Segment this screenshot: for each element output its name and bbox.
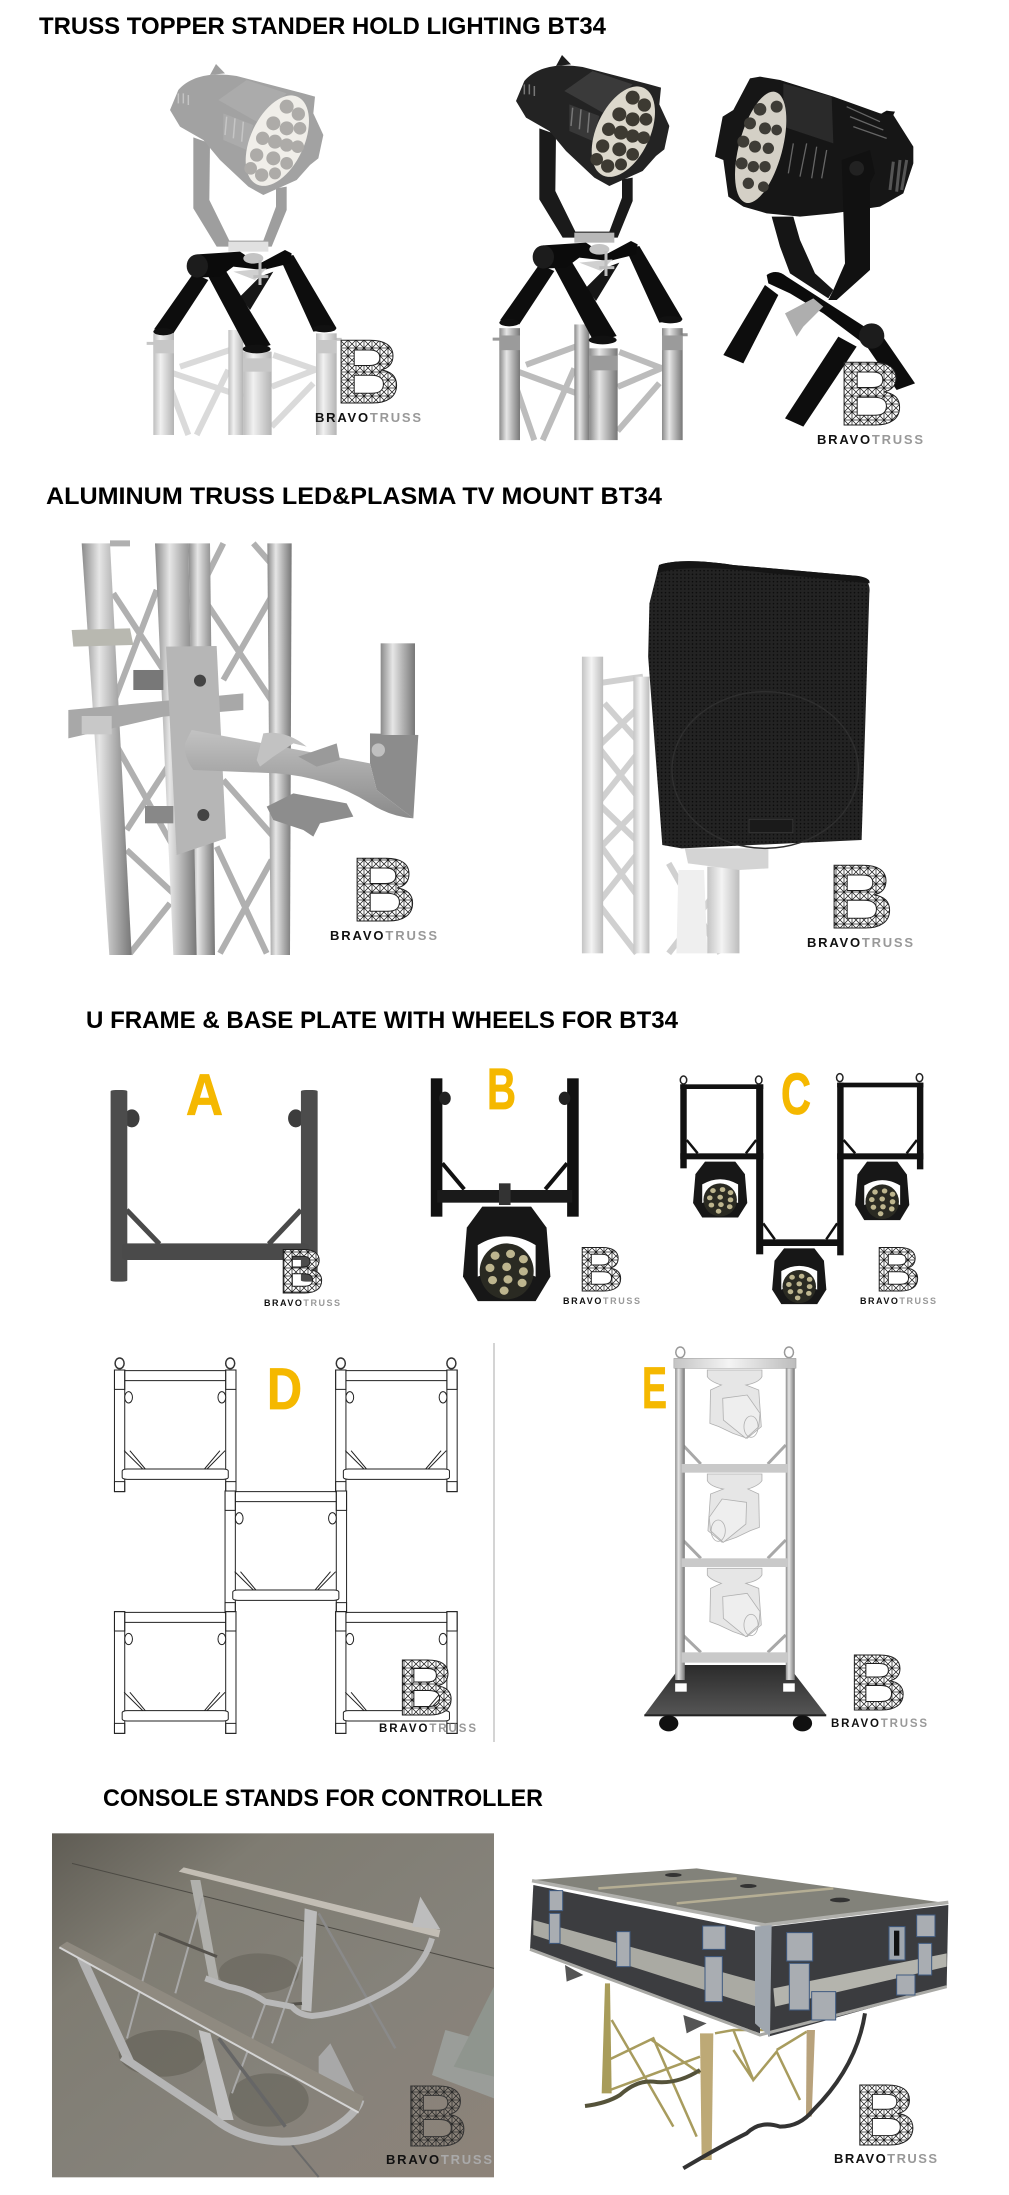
product: U frame A bbox=[111, 1090, 318, 1282]
logo: Bravo Truss 4: BRAVOTRUSS bbox=[807, 935, 913, 950]
logo: Bravo Truss 1: BRAVOTRUSS bbox=[315, 410, 421, 425]
photo: lamp with folded stand bbox=[715, 77, 915, 427]
logo: Bravo Truss 9: BRAVOTRUSS bbox=[831, 1718, 927, 1730]
logo: Bravo Truss 10: BRAVOTRUSS bbox=[386, 2152, 492, 2167]
photo: lamp on truss topper bbox=[493, 55, 688, 440]
photo: truss mount bracket bbox=[68, 543, 418, 955]
logo: Bravo Truss 4: B bbox=[828, 847, 894, 948]
logo: Bravo Truss 6 bbox=[563, 1235, 640, 1306]
logo: Bravo Truss 10: B bbox=[405, 2068, 468, 2165]
logo: Bravo Truss 1 bbox=[315, 322, 421, 425]
logo: Bravo Truss 8 bbox=[379, 1643, 476, 1735]
label: B: B bbox=[487, 1057, 516, 1122]
logo: Bravo Truss 11: B bbox=[854, 2067, 917, 2164]
logo: Bravo Truss 5: BRAVOTRUSS bbox=[264, 1298, 340, 1308]
logo: Bravo Truss 7: BRAVOTRUSS bbox=[860, 1296, 936, 1306]
logo: Bravo Truss 2 bbox=[817, 344, 923, 447]
logo: Bravo Truss 9: B bbox=[849, 1638, 907, 1727]
logo: Bravo Truss 7 bbox=[860, 1235, 936, 1306]
logo: Bravo Truss 3: B bbox=[351, 840, 417, 941]
label: D: D bbox=[267, 1357, 302, 1422]
logo: Bravo Truss 5: B bbox=[279, 1237, 324, 1307]
logo: Bravo Truss 6: B bbox=[578, 1235, 624, 1305]
logo: Bravo Truss 10 bbox=[386, 2068, 492, 2167]
photo: flight case on folding console stand bbox=[530, 1868, 948, 2168]
product: stacked frames on wheeled base plate E bbox=[644, 1347, 826, 1731]
logo: Bravo Truss 9 bbox=[831, 1638, 927, 1730]
logo: Bravo Truss 3: BRAVOTRUSS bbox=[330, 928, 437, 943]
photo: aluminum console stands on concrete floor bbox=[52, 1833, 494, 2177]
product: U frame B with moving head bbox=[431, 1078, 579, 1301]
logo: Bravo Truss 8: BRAVOTRUSS bbox=[379, 1723, 476, 1735]
logo: Bravo Truss 2: BRAVOTRUSS bbox=[817, 432, 923, 447]
photo: faded lamp on truss topper bbox=[147, 64, 342, 435]
label: C: C bbox=[781, 1062, 811, 1127]
product: U frame assembly C with three heads bbox=[680, 1074, 923, 1304]
title: TV mount: ALUMINUM TRUSS LED&PLASMA TV MOUNT BT34 bbox=[46, 483, 662, 510]
logo: Bravo Truss 1: B bbox=[335, 322, 401, 423]
title: U frame: U FRAME & BASE PLATE WITH WHEELS FOR BT34 bbox=[86, 1007, 678, 1034]
logo: Bravo Truss 11: BRAVOTRUSS bbox=[834, 2151, 937, 2166]
logo: Bravo Truss 6: BRAVOTRUSS bbox=[563, 1296, 640, 1306]
logo: Bravo Truss 2: B bbox=[838, 344, 904, 445]
title: console stands: CONSOLE STANDS FOR CONTROLLER bbox=[103, 1785, 543, 1812]
logo: Bravo Truss 3 bbox=[330, 840, 437, 943]
logo: Bravo Truss 8: B bbox=[397, 1643, 455, 1732]
logo: Bravo Truss 5 bbox=[264, 1237, 340, 1308]
label: E: E bbox=[642, 1356, 667, 1421]
diagram: line drawing of five U frames D bbox=[114, 1358, 457, 1733]
logo: Bravo Truss 11 bbox=[834, 2067, 937, 2166]
logo: Bravo Truss 4 bbox=[807, 847, 913, 950]
photo: speaker on truss bbox=[582, 561, 870, 953]
title: truss topper: TRUSS TOPPER STANDER HOLD LIGHTING BT34 bbox=[39, 13, 606, 40]
logo: Bravo Truss 7: B bbox=[875, 1235, 920, 1305]
label: A: A bbox=[186, 1063, 223, 1128]
